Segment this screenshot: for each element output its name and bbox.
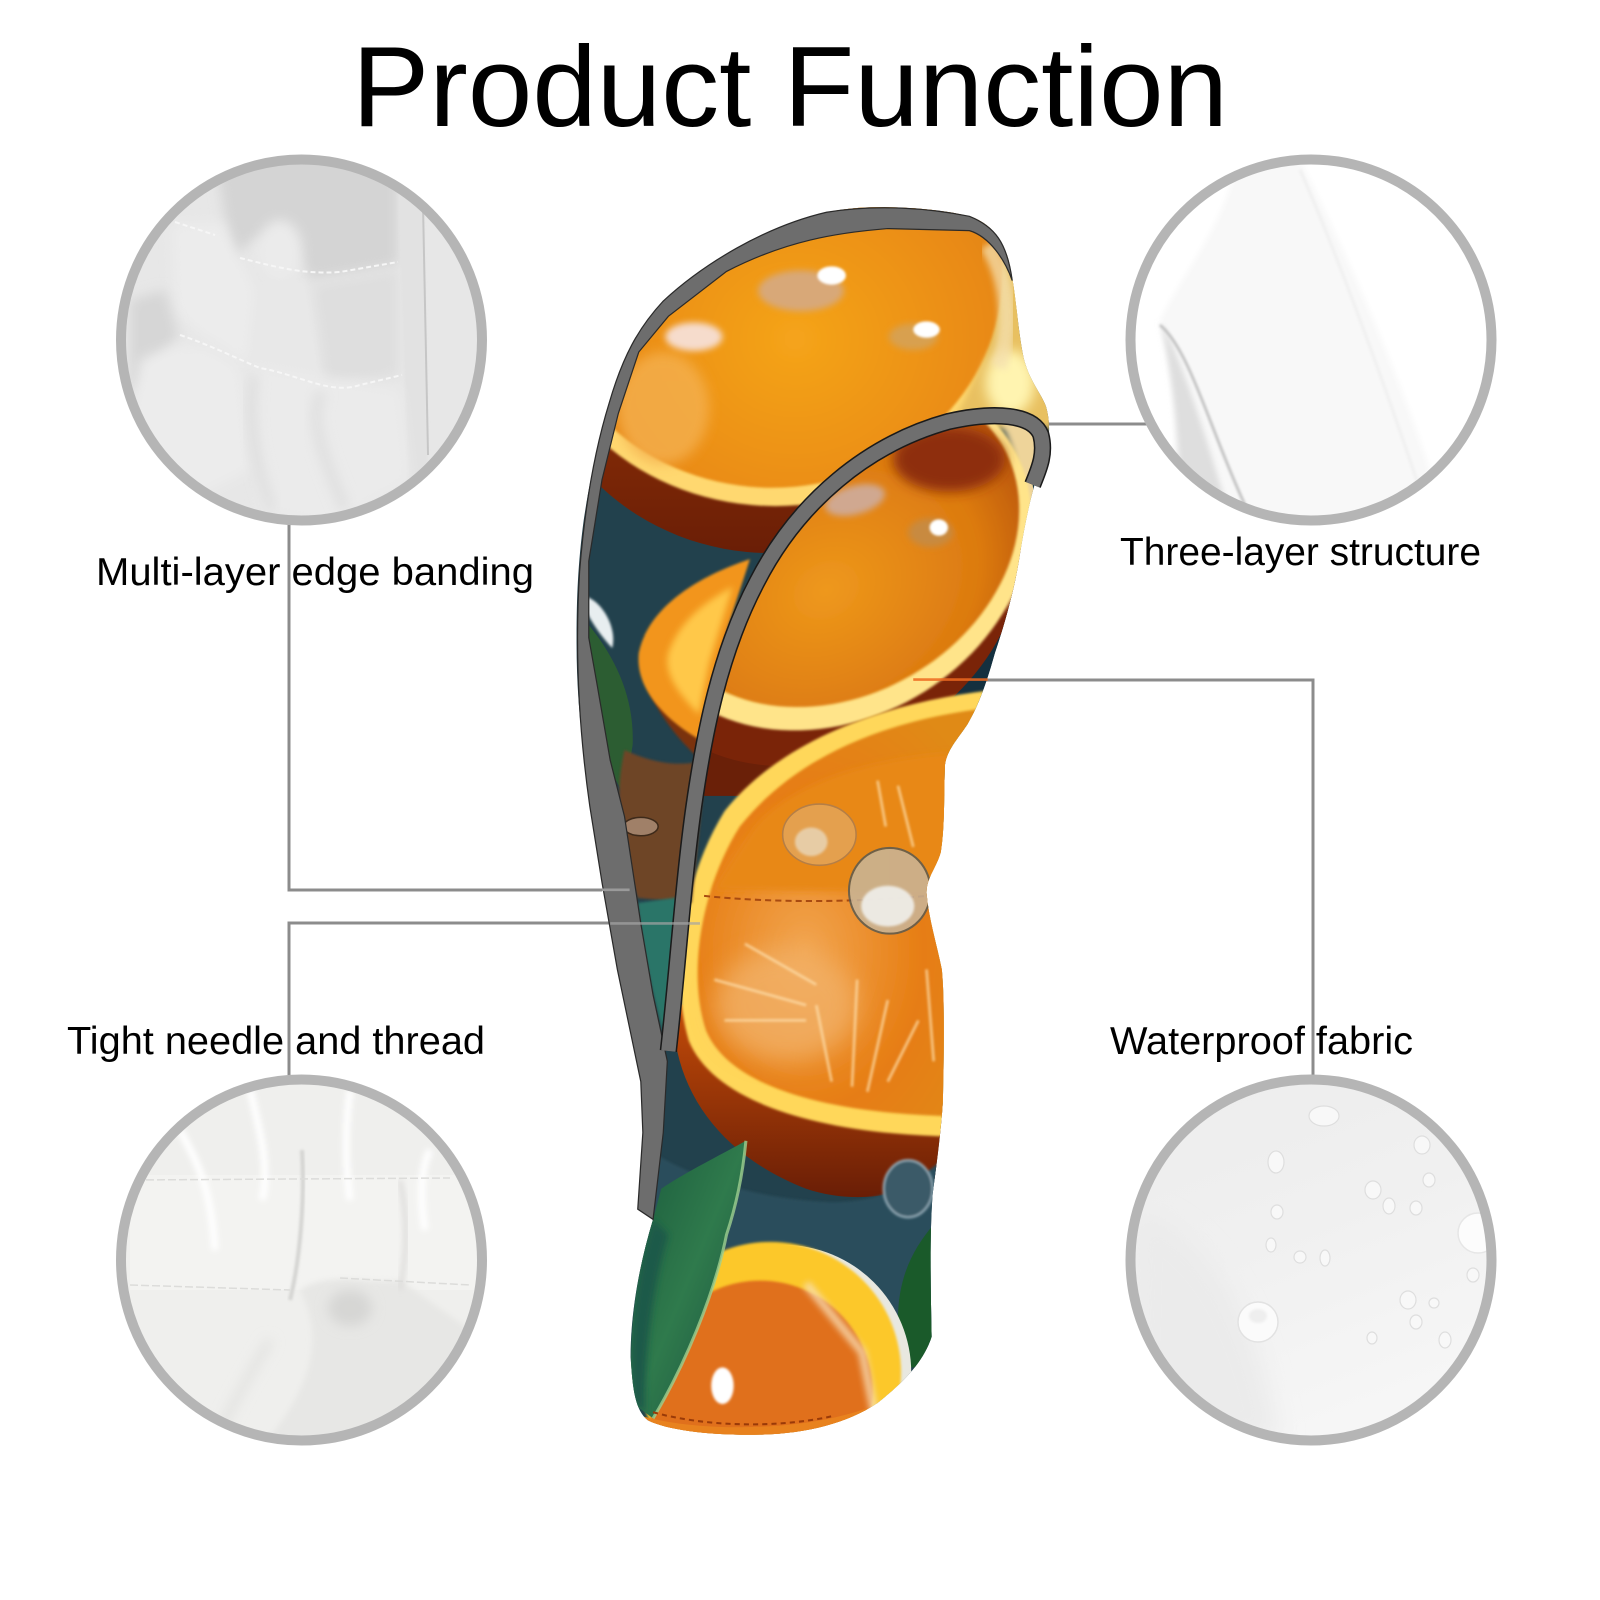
lower splash drop bbox=[884, 1160, 933, 1217]
hem stitching bbox=[653, 1412, 832, 1424]
second slice rim bbox=[718, 424, 1031, 732]
connector: three-layer structure bbox=[1042, 422, 1150, 426]
inner flap binding bbox=[668, 416, 1043, 1051]
left slice yellow glow bbox=[667, 587, 733, 714]
bottom slice pale wedge bbox=[806, 1284, 878, 1429]
left splash bbox=[587, 597, 613, 648]
third slice pulp bbox=[698, 706, 1005, 1116]
upper slice light patch bbox=[617, 352, 709, 464]
upper right pale rim bbox=[958, 255, 1050, 433]
circle border bbox=[121, 160, 482, 520]
label: multi-layer edge banding: Multi-layer edge banding bbox=[96, 551, 534, 594]
upper slice rim bbox=[610, 207, 1018, 508]
second slice pulp bbox=[724, 424, 1021, 709]
third slice rim bbox=[680, 689, 1005, 1137]
infographic canvas bbox=[68, 43, 1496, 1446]
left slice rim bbox=[638, 559, 750, 745]
bottom hem bbox=[643, 1408, 867, 1449]
stitching line bbox=[704, 894, 949, 901]
pale highlight top left bbox=[665, 322, 722, 351]
flap pale right edge bbox=[999, 424, 1034, 612]
right leaf bbox=[898, 1228, 932, 1368]
upper rim edge light bbox=[988, 245, 1007, 367]
bottom slice pulp bbox=[648, 1279, 874, 1435]
main leaf bbox=[631, 1141, 746, 1418]
teal leaf bbox=[638, 896, 688, 1051]
circle border bbox=[1130, 1080, 1492, 1440]
flap skin background bbox=[704, 752, 774, 796]
printed fabric bbox=[576, 207, 1050, 1435]
upper slice highlight bbox=[986, 350, 1035, 415]
bottom slice rim bbox=[644, 1240, 903, 1435]
product: golf club head cover with orange print bbox=[576, 207, 1052, 1435]
detail circle: tight needle and thread bbox=[110, 1070, 495, 1455]
stitched fabric folds bbox=[110, 1070, 495, 1455]
flap interior: second slice bbox=[704, 424, 1034, 796]
water droplets on fabric bbox=[1120, 1070, 1505, 1455]
faint pointer lines over product bbox=[602, 680, 988, 923]
outer edge binding bbox=[578, 208, 1012, 1219]
bottom highlight bbox=[711, 1367, 734, 1404]
seam close-up bbox=[1120, 150, 1505, 535]
label: tight needle and thread: Tight needle and thread bbox=[67, 1020, 485, 1063]
upper slice skin bbox=[602, 207, 984, 553]
water drops on upper slice bbox=[758, 266, 940, 350]
title: Product Function bbox=[352, 24, 1228, 151]
small bubble bbox=[623, 817, 658, 836]
left slice skin bbox=[650, 630, 726, 755]
fabric folds bbox=[110, 150, 495, 535]
circle border bbox=[121, 1080, 482, 1440]
lower water bbox=[633, 1153, 949, 1347]
bottom slice white ring bbox=[788, 1245, 912, 1410]
brown reflection bbox=[619, 750, 706, 903]
label: waterproof fabric: Waterproof fabric bbox=[1110, 1020, 1413, 1063]
connector: multi-layer edge banding bbox=[289, 525, 602, 890]
connector: tight needle and thread bbox=[289, 923, 610, 1075]
detail circle: waterproof fabric bbox=[1120, 1070, 1505, 1455]
third slice upper pulp bbox=[714, 753, 949, 893]
dark water background bbox=[561, 194, 1071, 1449]
detail circle: multi-layer edge banding bbox=[110, 150, 495, 535]
leaf rim bbox=[653, 1141, 746, 1418]
left green leaf bbox=[584, 622, 633, 796]
label: three-layer structure: Three-layer structure bbox=[1120, 531, 1481, 574]
flap water at right bbox=[944, 576, 1016, 780]
third slice pale fibres bbox=[714, 781, 934, 1092]
leaf dark side bbox=[631, 1219, 668, 1413]
second slice skin bbox=[712, 548, 1021, 766]
connector: waterproof fabric bbox=[985, 680, 1313, 1075]
third slice skin bbox=[673, 1000, 959, 1197]
glass water drops bbox=[783, 804, 931, 934]
water drops on second slice bbox=[822, 478, 953, 547]
upper slice pulp bbox=[614, 207, 1002, 490]
detail circle: three-layer structure bbox=[1120, 150, 1505, 535]
second slice dark top bbox=[893, 427, 1005, 492]
circle border bbox=[1130, 160, 1492, 520]
